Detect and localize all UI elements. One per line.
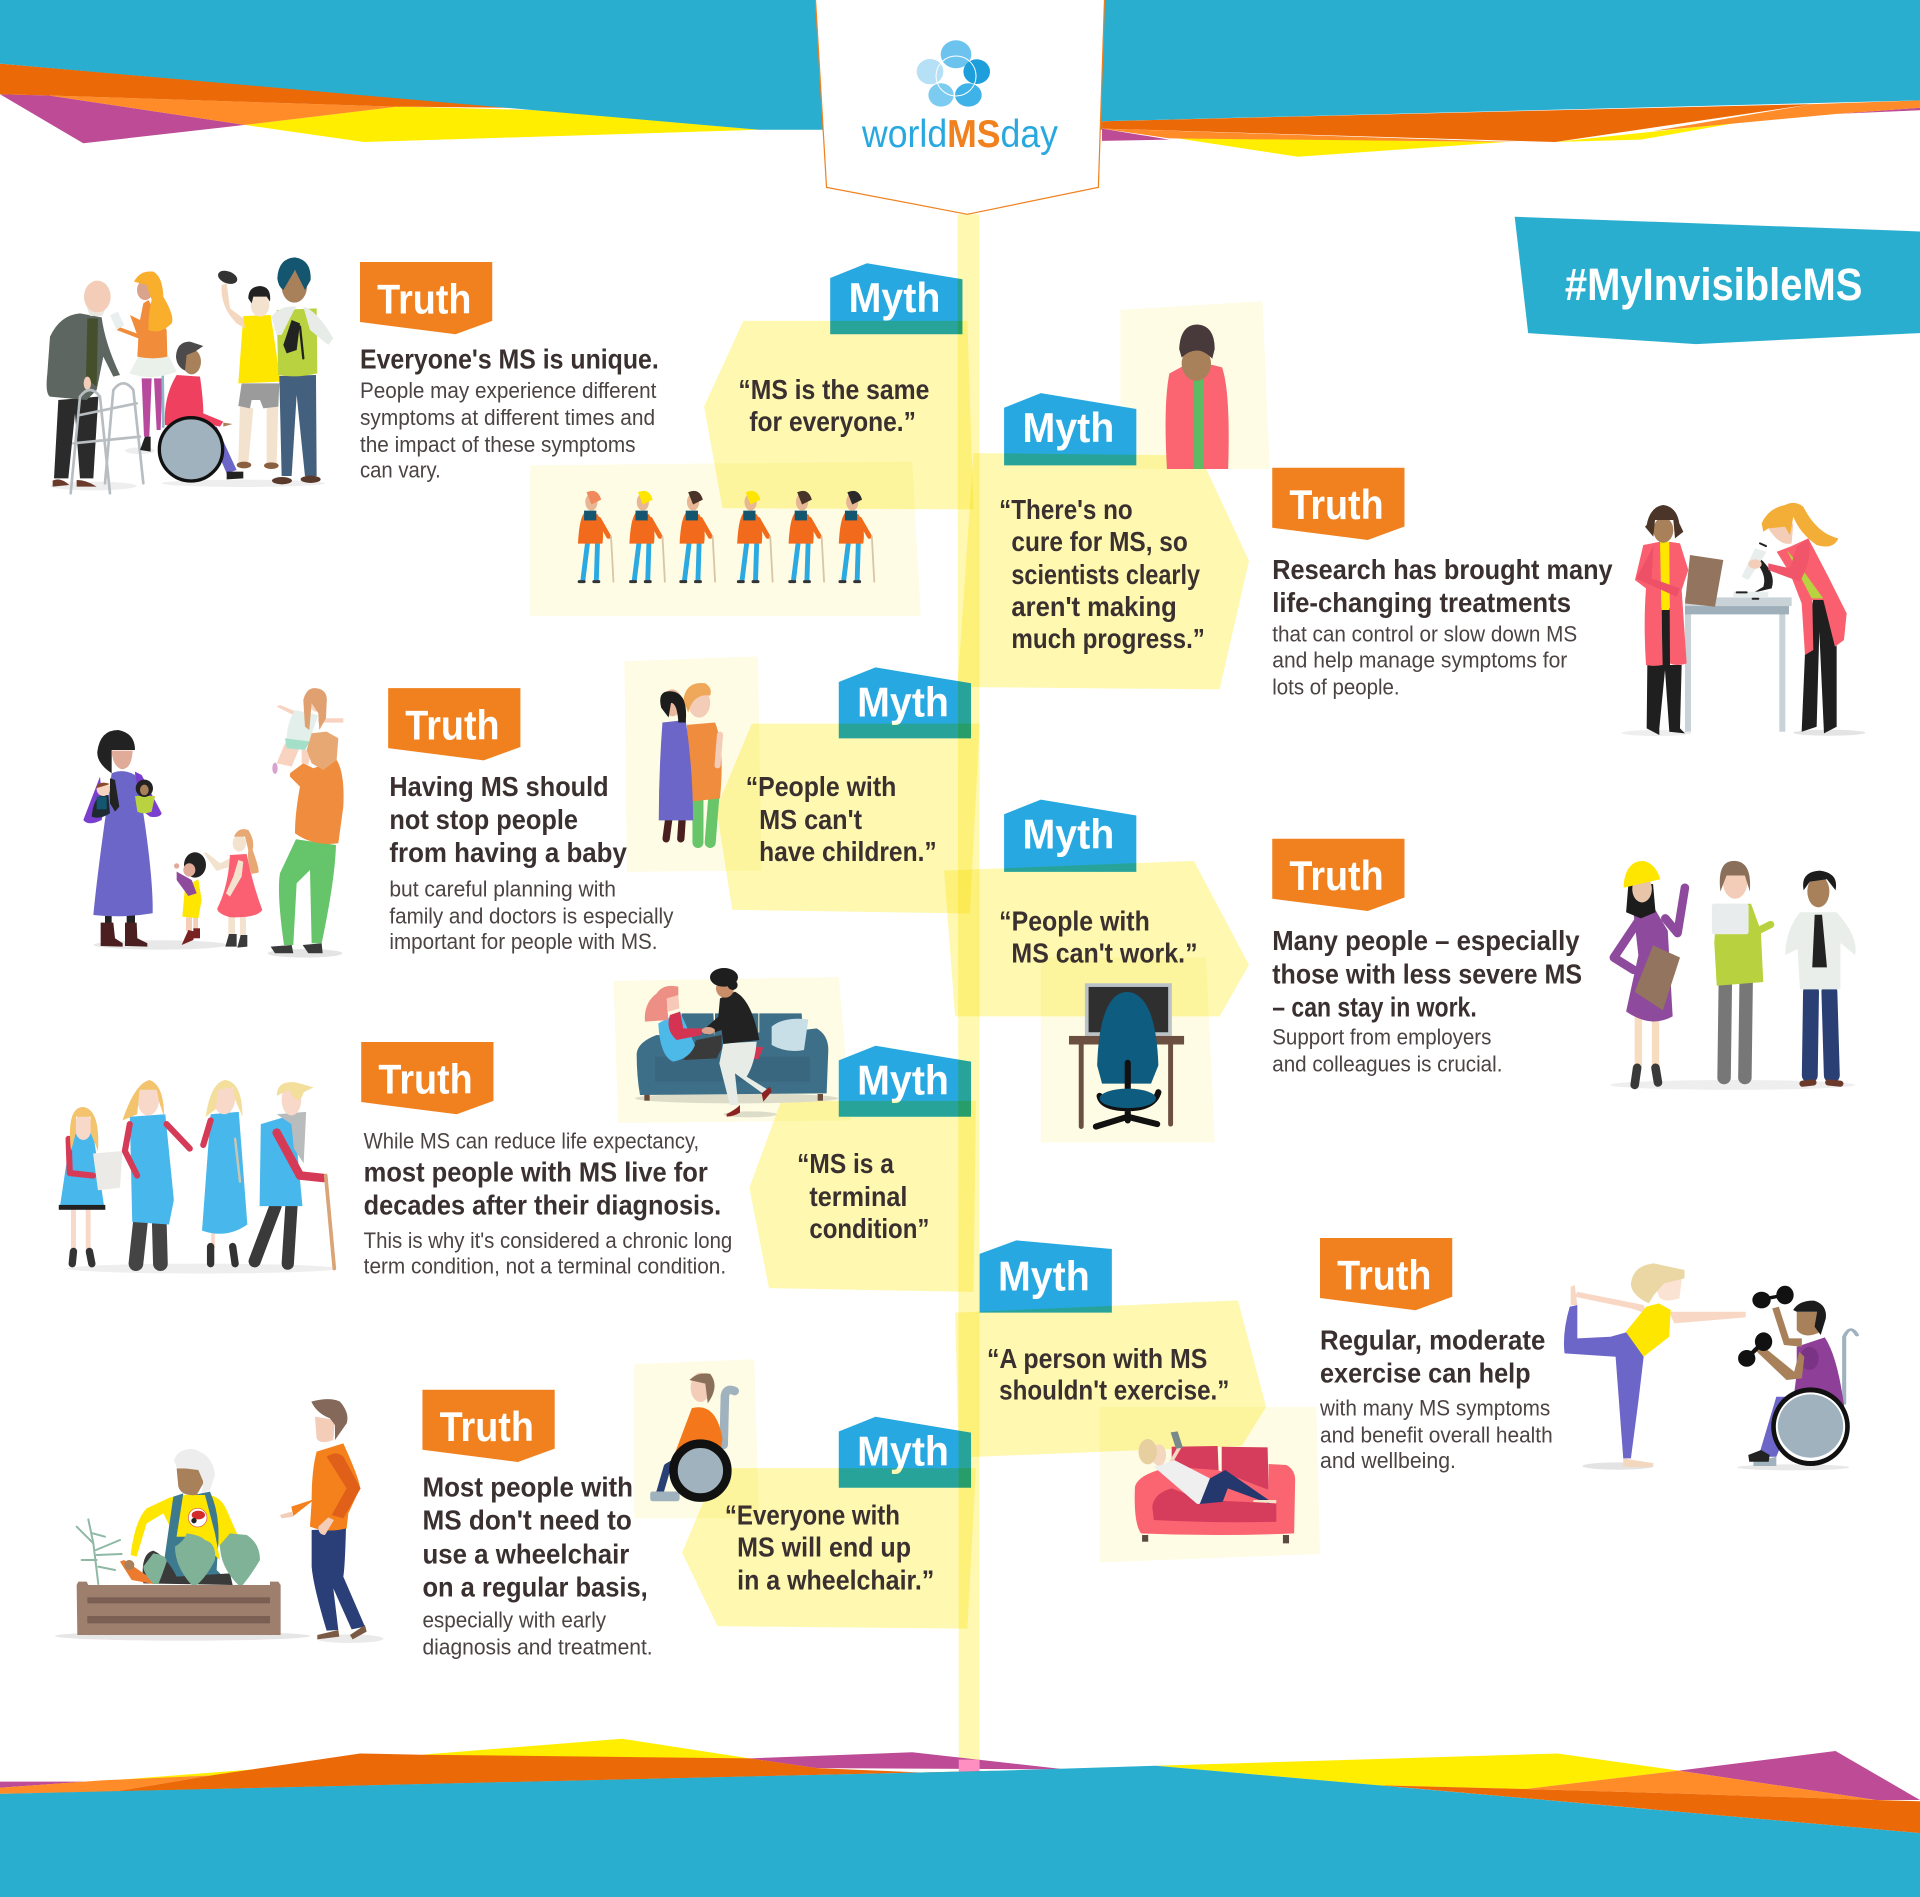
- truth text 7: Most people with: [422, 1471, 633, 1502]
- myth tag 6: Myth: [998, 1253, 1090, 1300]
- myth tag 4: Myth: [1022, 811, 1114, 858]
- myth quote 2: “There's no: [999, 494, 1133, 525]
- truth 2: [1272, 468, 1613, 699]
- illustration: gardening and onlooker: [55, 1399, 383, 1643]
- truth text 2: lots of people.: [1272, 674, 1400, 699]
- myth quote 7: MS will end up: [737, 1531, 911, 1562]
- myth quote 2: scientists clearly: [1011, 559, 1201, 590]
- truth 6: [1319, 1238, 1553, 1473]
- illustration: yoga pose: [1564, 1263, 1746, 1470]
- myth callout shape 1: [704, 321, 973, 509]
- myth quote 1: [738, 374, 929, 437]
- truth 4: [1272, 839, 1582, 1076]
- truth 7: [422, 1390, 653, 1659]
- bottom banner: [0, 1739, 1920, 1897]
- truth text 4: [1272, 925, 1582, 1076]
- myth quote 3: “People with: [746, 771, 896, 802]
- pale panel: covered face figure background: [1120, 301, 1270, 469]
- truth text 5: term condition, not a terminal condition.: [364, 1253, 726, 1278]
- myth quote 4: MS can't work.”: [1011, 937, 1198, 968]
- truth text 1: [360, 344, 659, 483]
- pale panel: red sofa background: [1100, 1407, 1320, 1562]
- myth callout shape 4: [944, 861, 1249, 1016]
- icon: world MS day flower: [917, 40, 990, 107]
- illustration: couple on blue sofa: [635, 968, 838, 1117]
- hashtag banner: [1515, 217, 1920, 344]
- truth text 6: and benefit overall health: [1320, 1422, 1553, 1447]
- myth quote 1: for everyone.”: [749, 406, 916, 437]
- illustration: person reclining on red sofa: [1135, 1431, 1295, 1543]
- truth text 5: decades after their diagnosis.: [364, 1190, 721, 1221]
- truth text 5: This is why it's considered a chronic long: [364, 1228, 732, 1253]
- hashtag banner: #MyInvisibleMS: [1565, 259, 1862, 310]
- truth text 4: – can stay in work.: [1272, 991, 1477, 1022]
- truth tag 2: [1272, 468, 1404, 540]
- truth text 2: that can control or slow down MS: [1272, 622, 1577, 647]
- truth text 1: Everyone's MS is unique.: [360, 344, 659, 375]
- illustration: six identical elderly figures: [578, 491, 874, 582]
- myth quote 1: “MS is the same: [738, 374, 929, 405]
- myth tag 2: [1004, 393, 1136, 465]
- truth text 2: [1272, 554, 1613, 699]
- logo panel: [816, 0, 1104, 214]
- myth quote 3: have children.”: [759, 836, 937, 867]
- myth quote 2: cure for MS, so: [1011, 526, 1188, 557]
- illustration: person in wheelchair: [650, 1373, 735, 1501]
- truth tag 1: [360, 262, 492, 334]
- truth text 4: and colleagues is crucial.: [1272, 1051, 1502, 1076]
- myth tag 3: Myth: [857, 678, 949, 725]
- myth quote 4: “People with: [999, 906, 1150, 937]
- myth tag 5: [839, 1046, 971, 1117]
- myth quote 5: [797, 1148, 929, 1244]
- truth text 6: [1319, 1324, 1553, 1473]
- truth text 7: [422, 1471, 653, 1659]
- myth callout shape 3: [716, 724, 980, 913]
- truth text 2: and help manage symptoms for: [1272, 647, 1567, 672]
- myth quote 7: in a wheelchair.”: [737, 1564, 934, 1595]
- myth quote 3: [746, 771, 937, 867]
- pale panel: sofa couple background: [613, 977, 851, 1123]
- truth text 3: but careful planning with: [389, 876, 616, 901]
- truth text 7: on a regular basis,: [422, 1572, 648, 1603]
- myth 1: MS is the same: [704, 263, 973, 509]
- myth quote 6: [987, 1343, 1229, 1406]
- myth 2: no cure: [958, 393, 1249, 689]
- myth callout shape 2: [958, 453, 1249, 689]
- pale panel: identical figures background: [530, 462, 921, 616]
- truth tag 5: [361, 1042, 493, 1114]
- truth text 4: Support from employers: [1272, 1024, 1491, 1049]
- truth text 3: important for people with MS.: [389, 929, 658, 954]
- truth tag 6: [1320, 1238, 1452, 1310]
- truth text 7: MS don't need to: [422, 1504, 632, 1535]
- illustration: four generations: [59, 1080, 337, 1273]
- truth 5: [361, 1042, 732, 1278]
- truth 1: [360, 262, 659, 483]
- truth text 1: symptoms at different times and: [360, 405, 655, 430]
- truth text 5: While MS can reduce life expectancy,: [364, 1129, 699, 1154]
- central timeline stripe: [958, 214, 980, 1769]
- myth tag 4: [1004, 800, 1136, 872]
- truth text 6: with many MS symptoms: [1319, 1396, 1550, 1421]
- myth 6: exercise: [955, 1240, 1266, 1457]
- illustration: researchers with microscope: [1622, 503, 1865, 736]
- myth tag 7: [839, 1417, 971, 1488]
- truth tag 7: [422, 1390, 555, 1462]
- truth text 1: the impact of these symptoms: [360, 432, 636, 457]
- truth text 7: especially with early: [422, 1607, 606, 1632]
- truth text 3: family and doctors is especially: [389, 903, 673, 928]
- truth 3: [388, 688, 673, 954]
- illustration: person covering their face: [1166, 325, 1229, 469]
- myth quote 4: [999, 906, 1198, 968]
- myth callout shape 6: [955, 1300, 1266, 1457]
- truth text 4: those with less severe MS: [1272, 958, 1582, 989]
- myth quote 5: terminal: [809, 1181, 907, 1212]
- illustration: couple embracing: [659, 683, 722, 842]
- myth tag 6: [980, 1240, 1112, 1313]
- truth text 5: most people with MS live for: [364, 1157, 708, 1188]
- truth text 1: can vary.: [360, 458, 441, 483]
- illustration: diverse group of people with MS: [47, 257, 333, 493]
- myth quote 6: “A person with MS: [987, 1343, 1207, 1374]
- truth text 3: not stop people: [389, 804, 578, 835]
- myth tag 5: Myth: [857, 1057, 949, 1104]
- myth tag 3: [839, 667, 971, 738]
- myth quote 5: “MS is a: [797, 1148, 894, 1179]
- logo wordmark: worldMSday: [861, 113, 1058, 156]
- myth tag 2: Myth: [1022, 404, 1114, 451]
- truth text 3: [389, 771, 673, 954]
- pale panel: desk background: [1041, 958, 1215, 1142]
- pale panel: wheelchair background: [634, 1359, 759, 1518]
- myth tag 1: [830, 263, 962, 334]
- truth text 6: Regular, moderate: [1320, 1324, 1545, 1355]
- truth text 3: from having a baby: [389, 837, 627, 868]
- myth quote 5: condition”: [809, 1213, 929, 1244]
- truth tag 4: [1272, 839, 1404, 911]
- myth tag 7: Myth: [857, 1428, 949, 1475]
- truth text 5: [364, 1129, 732, 1278]
- truth text 7: diagnosis and treatment.: [422, 1634, 653, 1659]
- truth text 4: Many people – especially: [1272, 925, 1580, 956]
- truth text 2: Research has brought many: [1272, 554, 1613, 585]
- truth text 6: and wellbeing.: [1320, 1448, 1456, 1473]
- truth text 1: People may experience different: [360, 378, 656, 403]
- truth text 6: exercise can help: [1320, 1357, 1531, 1388]
- pale panel: couple background: [624, 656, 762, 872]
- truth tag 7: Truth: [440, 1403, 534, 1450]
- truth text 2: life-changing treatments: [1272, 587, 1571, 618]
- truth tag 3: Truth: [405, 702, 500, 749]
- myth 7: wheelchair: [682, 1417, 976, 1629]
- myth 4: work: [944, 800, 1249, 1016]
- truth tag 5: Truth: [378, 1055, 473, 1102]
- truth text 3: Having MS should: [389, 771, 609, 802]
- myth quote 2: much progress.”: [1011, 623, 1205, 654]
- truth text 7: use a wheelchair: [422, 1539, 629, 1570]
- illustration: colleagues at work: [1610, 861, 1856, 1090]
- truth tag 1: Truth: [377, 275, 471, 322]
- illustration: wheelchair user lifting dumbbells: [1737, 1286, 1857, 1470]
- myth callout shape 7: [682, 1468, 976, 1629]
- myth quote 6: shouldn't exercise.”: [999, 1375, 1229, 1406]
- myth 3: children: [716, 667, 980, 913]
- top banner: [0, 0, 1920, 157]
- illustration: empty office desk and chair: [1069, 983, 1184, 1127]
- myth quote 2: [999, 494, 1205, 654]
- truth tag 4: Truth: [1289, 852, 1384, 899]
- truth tag 2: Truth: [1289, 481, 1384, 528]
- myth quote 2: aren't making: [1011, 591, 1177, 622]
- myth 5: terminal: [749, 1046, 976, 1292]
- truth tag 6: Truth: [1337, 1251, 1431, 1298]
- myth quote 7: [725, 1500, 934, 1595]
- illustration: family with children: [83, 688, 344, 958]
- myth quote 7: “Everyone with: [725, 1500, 900, 1531]
- myth quote 3: MS can't: [759, 804, 862, 835]
- myth callout shape 5: [749, 1101, 976, 1292]
- truth tag 3: [388, 688, 520, 760]
- myth tag 1: Myth: [849, 274, 940, 321]
